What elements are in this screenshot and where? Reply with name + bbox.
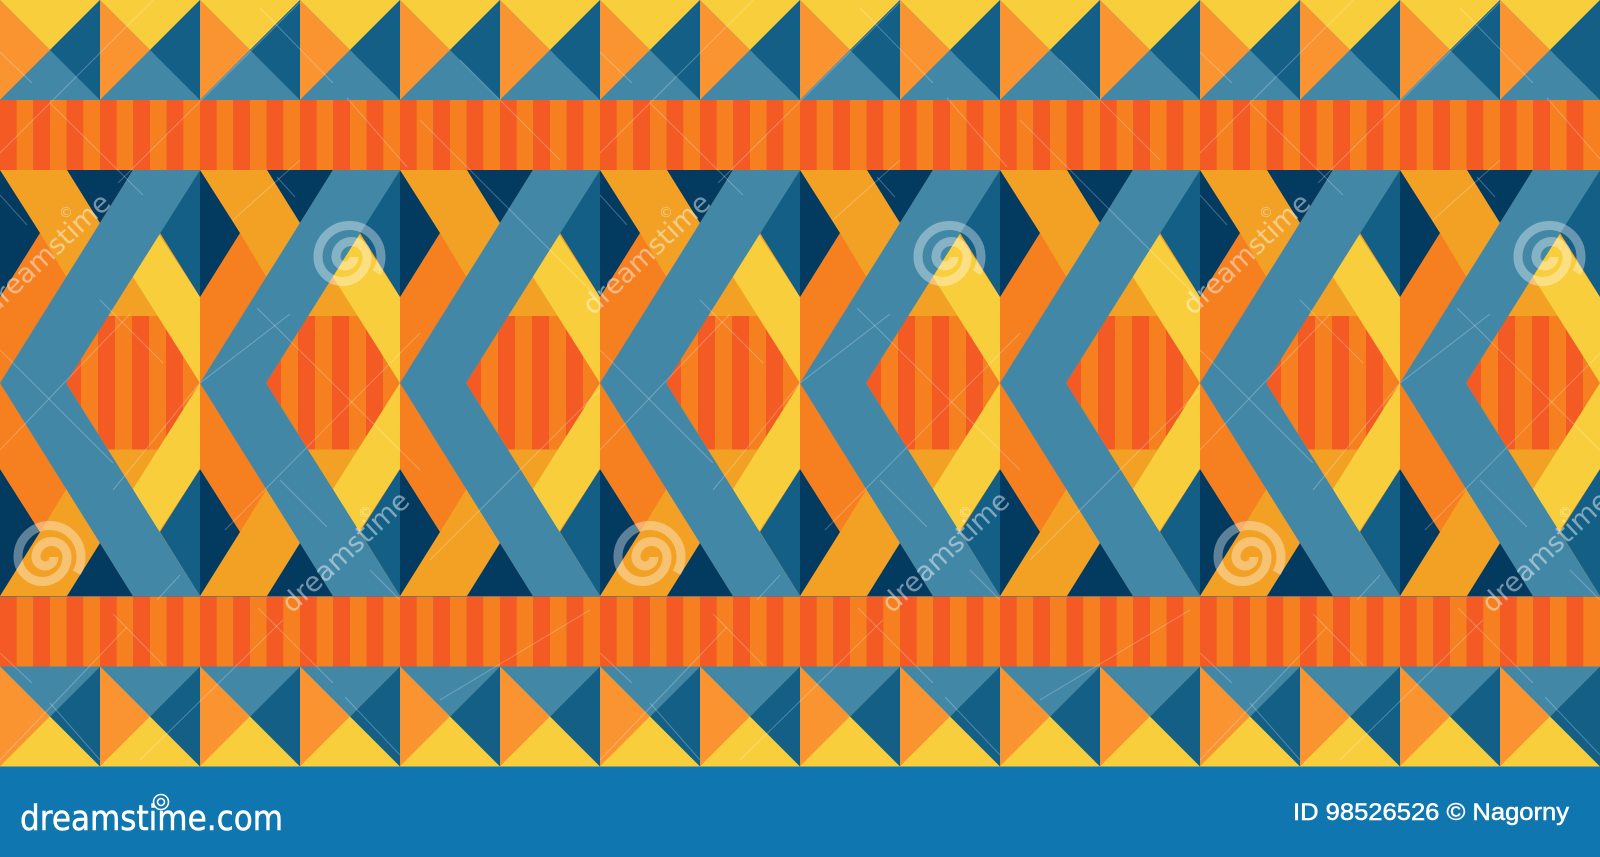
footer logo text: dreamstime.com bbox=[20, 799, 283, 839]
image id credit: ID 98526526 © Nagorny bbox=[1293, 799, 1569, 826]
footer bar bbox=[0, 767, 1600, 857]
panel: central woven chevron band bbox=[0, 170, 1600, 596]
watermark: spirals bbox=[18, 226, 1581, 582]
panel: top striped band bbox=[0, 100, 1600, 170]
watermark: rotated dreamstime text: dreamstime bbox=[577, 187, 717, 321]
icon: logo spiral bbox=[154, 794, 168, 810]
watermark: rotated dreamstime text: dreamstime bbox=[1177, 187, 1317, 321]
watermark: rotated dreamstime text: © bbox=[59, 205, 73, 221]
watermark: rotated dreamstime text: dreamstime bbox=[276, 485, 416, 619]
panel: bottom striped band bbox=[0, 596, 1600, 666]
watermark: rotated dreamstime text: © bbox=[1259, 205, 1273, 221]
panel: top triangle row bbox=[0, 0, 1600, 100]
panel: bottom triangle row bbox=[0, 666, 1600, 766]
watermark: rotated dreamstime text: © bbox=[1558, 505, 1572, 521]
watermark: rotated dreamstime text: dreamstime bbox=[876, 485, 1016, 619]
watermark: rotated dreamstime text: © bbox=[958, 505, 972, 521]
watermark: rotated dreamstime text bbox=[0, 187, 1600, 619]
watermark: rotated dreamstime text: © bbox=[659, 205, 673, 221]
watermark: rotated dreamstime text: © bbox=[358, 505, 372, 521]
